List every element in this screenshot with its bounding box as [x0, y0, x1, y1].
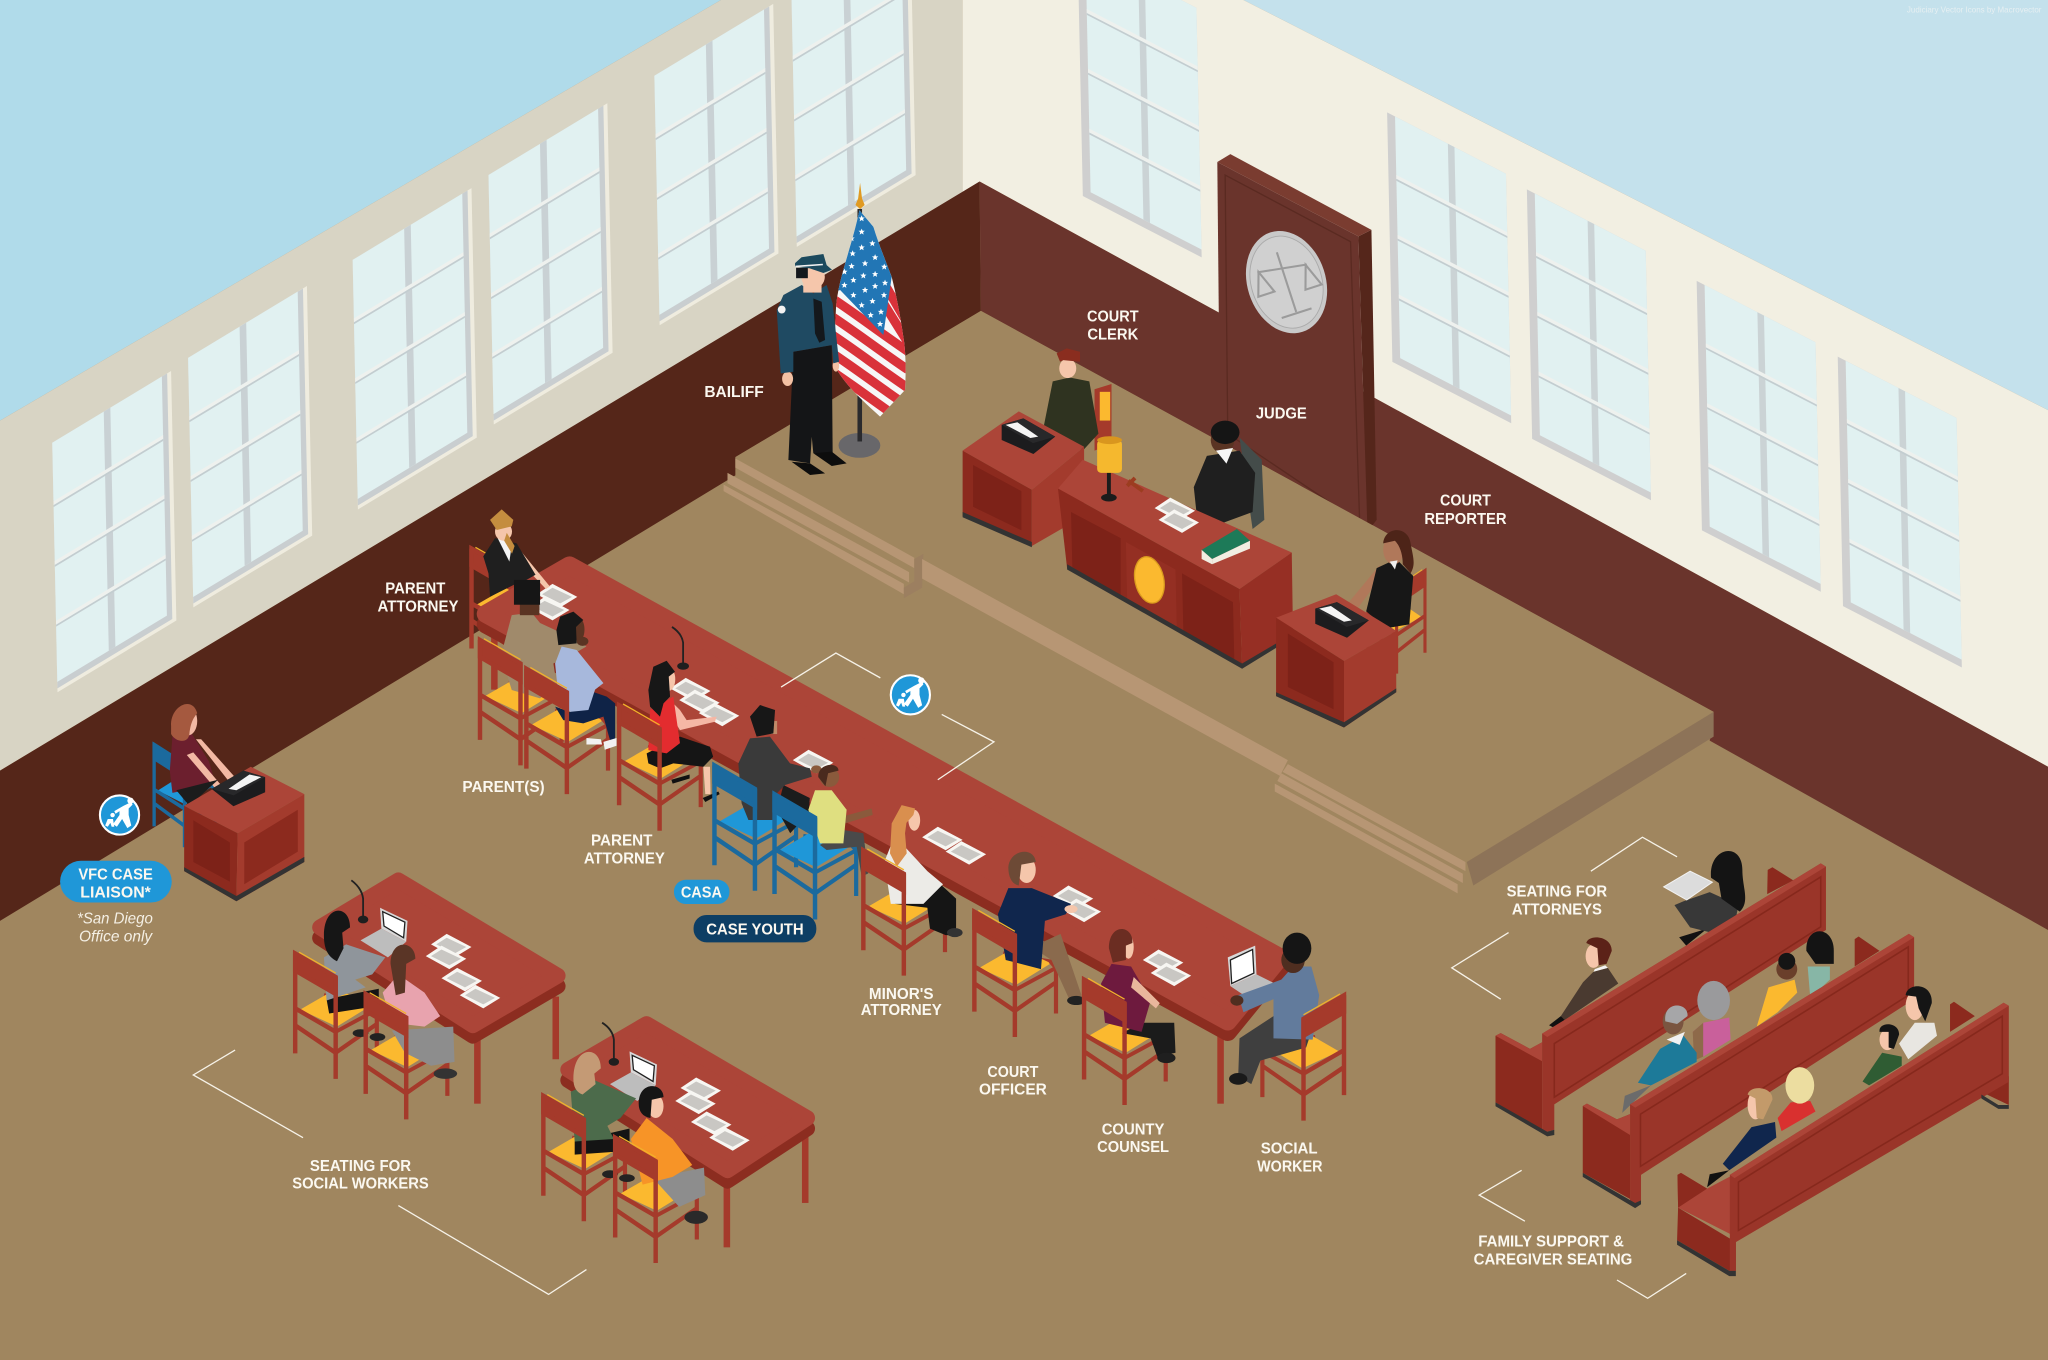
label: court reporter: REPORTER: [1424, 511, 1507, 528]
label: casa: CASA: [681, 884, 722, 901]
label: minor's attorney: MINOR'S: [869, 986, 934, 1003]
person: parent attorney seated at table end: [483, 509, 550, 597]
judge bench: [1058, 436, 1293, 669]
flag and bailiff group: [777, 183, 908, 475]
chair backs at long table: [480, 639, 1344, 1121]
label: parent attorney: PARENT: [591, 833, 653, 850]
label: parent attorney left: [377, 581, 459, 615]
laptop: [610, 1051, 657, 1101]
person: parent seated man: [503, 580, 586, 698]
label: casa: [674, 880, 729, 904]
pew 1: [1496, 863, 1826, 1136]
label: parent attorney left: ATTORNEY: [377, 598, 459, 615]
chairs: [300, 989, 447, 1096]
icon: vfc badge long table: [891, 675, 930, 714]
person: parent attorney: [647, 661, 720, 802]
person: court reporter: [1348, 530, 1414, 628]
left wall windows: [52, 0, 916, 692]
label: court reporter: [1424, 492, 1507, 528]
left wainscot: [0, 182, 981, 921]
person: elderly man: [1622, 1006, 1697, 1113]
label: seating for attorneys: ATTORNEYS: [1512, 901, 1602, 918]
person: county counsel: [1101, 929, 1176, 1063]
person: man in white shirt: [1899, 986, 1937, 1059]
laptop: [1228, 946, 1275, 997]
pew 3: [1677, 1002, 2009, 1276]
flag stand: [839, 183, 880, 458]
label: minor's attorney: ATTORNEY: [861, 1002, 942, 1019]
label: court clerk: CLERK: [1087, 327, 1139, 344]
bracket around long table: [781, 653, 994, 780]
judge door panel: [1217, 154, 1377, 532]
people behind pew 1: [1549, 851, 1745, 1028]
label: county counsel: COUNTY: [1102, 1121, 1165, 1138]
lamp: [1097, 436, 1122, 502]
left wall: [0, 0, 963, 771]
steno machine: [1002, 418, 1055, 454]
label: county counsel: COUNSEL: [1097, 1139, 1169, 1156]
reporter desk: [1276, 594, 1396, 728]
label: vfc case liaison: LIAISON*: [80, 884, 152, 901]
label: seating for social workers: SEATING FOR: [310, 1158, 411, 1175]
person: social worker gray: [324, 911, 385, 1041]
label: court clerk: COURT: [1087, 308, 1139, 325]
person: woman in red: [1778, 1067, 1816, 1131]
person: man in brown jacket: [1549, 937, 1618, 1028]
person: social worker orange: [631, 1086, 708, 1224]
steps left: [724, 458, 923, 598]
person: parent seated woman: [555, 612, 616, 750]
label: minor's attorney: [861, 986, 942, 1019]
note: san diego: Office only: [79, 929, 153, 946]
credit: Judiciary Vector Icons by Macrovector: [1907, 5, 2042, 14]
person: bailiff: [777, 254, 847, 475]
steno machine: [1315, 602, 1369, 638]
label: family support seating: FAMILY SUPPORT &: [1478, 1234, 1624, 1251]
label: social worker: [1257, 1140, 1322, 1176]
pew 2: [1583, 934, 1914, 1208]
people behind pew 3: [1707, 986, 1937, 1187]
sky right: [1243, 0, 2048, 410]
label: social worker: SOCIAL: [1261, 1140, 1318, 1157]
bracket: family: [1479, 1170, 1686, 1298]
microphone: [602, 1023, 619, 1066]
label: court reporter: COURT: [1440, 492, 1491, 509]
label: seating for attorneys: SEATING FOR: [1507, 884, 1607, 901]
person: woman in mint: [1806, 931, 1834, 998]
label: case youth: CASE YOUTH: [706, 922, 804, 939]
label: parent attorney: ATTORNEY: [584, 850, 665, 867]
label: parent attorney: [584, 833, 665, 867]
label: family support seating: [1474, 1234, 1632, 1268]
sky left: [0, 0, 721, 421]
flag: [835, 210, 906, 417]
person: minor's attorney: [884, 805, 963, 937]
right wall: [963, 0, 2048, 767]
person: case youth: [808, 765, 873, 877]
label: vfc case liaison: [60, 861, 172, 903]
person: casa: [738, 705, 822, 833]
table top: [568, 1034, 807, 1181]
note: san diego: [77, 910, 153, 946]
laptop: [360, 908, 408, 957]
person: court officer: [998, 852, 1085, 1005]
label: social worker: WORKER: [1257, 1159, 1322, 1176]
judge chair and judge: [1194, 421, 1264, 529]
label: family support seating: CAREGIVER SEATING: [1474, 1251, 1632, 1268]
label: case youth: [694, 915, 816, 942]
label: court officer: [979, 1064, 1047, 1099]
person: child in green: [1863, 1024, 1902, 1085]
note: san diego: *San Diego: [77, 910, 153, 927]
steps right: [1275, 764, 1465, 893]
label: seating for social workers: [292, 1158, 429, 1193]
seal on bench: [1130, 554, 1168, 606]
person: vfc case liaison: [170, 704, 234, 806]
microphone: [672, 627, 689, 670]
label: parents: PARENT(S): [462, 779, 545, 796]
book: [1202, 529, 1250, 564]
label: bailiff: BAILIFF: [704, 384, 764, 401]
vfc liaison desk: [184, 767, 304, 901]
clerk desk: [963, 411, 1084, 547]
chair backs: [543, 1095, 656, 1263]
person: social worker pink: [383, 945, 457, 1079]
label: court officer: COURT: [987, 1064, 1039, 1081]
label: parent attorney left: PARENT: [385, 581, 446, 598]
label: court clerk: [1087, 308, 1139, 344]
bracket: attorneys: [1452, 837, 1677, 999]
label: county counsel: [1097, 1121, 1169, 1156]
papers: [1155, 498, 1195, 521]
icon: vfc badge liaison: [100, 795, 139, 835]
person: court clerk: [1044, 348, 1110, 451]
reporter chair: [1368, 570, 1425, 674]
social workers table A: [295, 880, 559, 1119]
long table: [486, 566, 1280, 1104]
gavel: [1127, 478, 1143, 491]
platform riser: [922, 559, 1288, 776]
person: social worker: [1229, 933, 1319, 1085]
person: man in navy: [1707, 1088, 1776, 1187]
chairs at long table: [472, 547, 1339, 1097]
right wall windows: [1078, 0, 1962, 667]
chair backs: [295, 952, 406, 1119]
vfc liaison chair: [154, 744, 215, 847]
people behind pew 2: [1622, 931, 1834, 1113]
clerk chair: [1095, 384, 1112, 451]
person: social worker green: [571, 1052, 636, 1182]
microphone: [351, 880, 368, 923]
icon: scales seal: [1233, 220, 1340, 344]
table top: [320, 891, 558, 1036]
label: seating for social workers: SOCIAL WORKERS: [292, 1176, 429, 1193]
chairs: [548, 1131, 697, 1240]
platform: [724, 311, 1714, 893]
steno machine: [212, 771, 265, 806]
social workers table B: [543, 1023, 808, 1263]
label: vfc case liaison: VFC CASE: [78, 866, 153, 883]
papers: [426, 934, 500, 1008]
label: court officer: OFFICER: [979, 1082, 1047, 1099]
label: judge: JUDGE: [1256, 406, 1307, 423]
right wainscot: [980, 182, 2048, 930]
person: attorney woman with papers: [1664, 851, 1745, 946]
person: child in yellow: [1757, 953, 1797, 1027]
papers: [529, 584, 1191, 986]
bracket: social workers: [193, 1050, 586, 1294]
label: seating for attorneys: [1507, 884, 1607, 918]
papers: [675, 1078, 750, 1151]
person: elderly woman: [1693, 981, 1731, 1061]
